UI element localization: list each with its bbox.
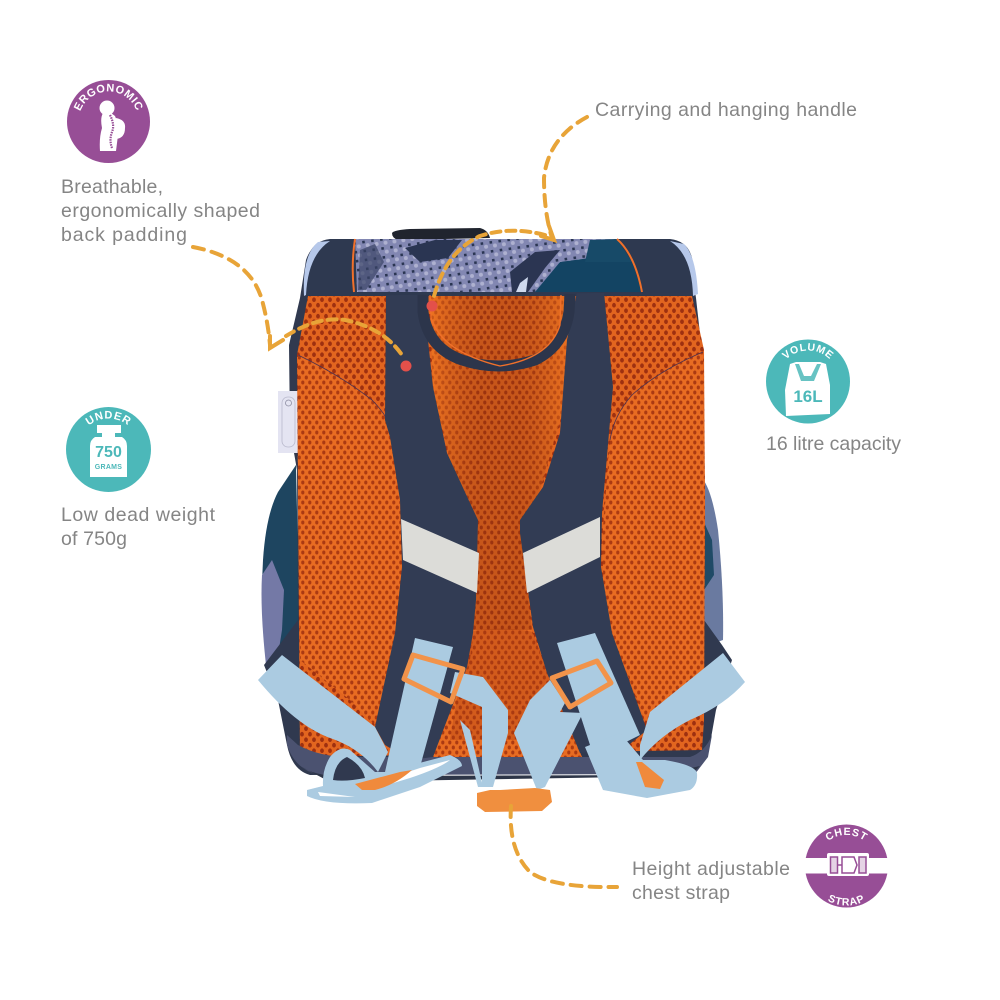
icon: weight (90, 425, 127, 477)
reflective strip right (523, 517, 600, 593)
text: ergonomic description: Breathable, (61, 176, 163, 198)
text: chest strap description: Height adjustable (632, 858, 790, 880)
strap band (805, 858, 888, 874)
reflective strip left (401, 519, 479, 593)
right side pocket (695, 470, 723, 650)
text: volume description: 16 litre capacity (766, 433, 901, 455)
backpack body (264, 240, 732, 775)
badge: volume (766, 340, 850, 424)
text: ergonomic description: back padding (61, 224, 187, 246)
left side pocket (262, 465, 300, 700)
badge text: under: UNDER (85, 410, 130, 425)
text: weight description: Low dead weight (61, 504, 216, 526)
left chest strap (450, 672, 508, 787)
centre mesh channel (430, 296, 582, 757)
badge text: strap: STRAP (828, 895, 863, 906)
right lower strap (557, 633, 640, 745)
right padded mesh (602, 352, 705, 725)
badge: chest strap (806, 824, 888, 908)
text: chest strap description: chest strap (632, 882, 730, 904)
weight unit: GRAMS (95, 464, 122, 471)
bottom edge band (287, 735, 712, 775)
left shoulder strap (375, 292, 478, 760)
badge text: ergonomic: ERGONOMIC (74, 84, 142, 111)
icon: backpack (785, 362, 830, 416)
backpack photo (258, 228, 745, 812)
left strap clip (355, 770, 412, 790)
side strap right (640, 653, 745, 760)
left buckle (404, 655, 463, 702)
upper mesh panel (297, 296, 705, 757)
arrow head: handle (541, 226, 554, 240)
top carry handle (392, 228, 490, 240)
right strap loop (585, 733, 697, 798)
right chest strap (514, 680, 583, 790)
dashed curve to handle point (433, 231, 545, 300)
back handle (423, 294, 570, 366)
dot: handle (426, 300, 438, 312)
dashed leader: handle (433, 117, 587, 300)
dot: back padding (400, 360, 412, 372)
side strap left (258, 655, 388, 772)
right buckle (552, 661, 611, 707)
icon: spine figure (100, 100, 125, 151)
right strap clip (636, 762, 664, 789)
mesh edge lines (298, 352, 703, 445)
text: weight description: of 750g (61, 528, 127, 550)
badge text: chest: CHEST (826, 828, 868, 840)
arrow head: back padding (270, 336, 283, 348)
tag (278, 391, 299, 453)
badge: weight (66, 407, 151, 492)
badge text: volume: VOLUME (781, 343, 834, 359)
icon: buckle (827, 853, 869, 876)
top flap (304, 239, 698, 296)
left lower strap (385, 638, 453, 772)
text: handle description: Carrying and hanging handle (595, 99, 857, 121)
text: ergonomic description: ergonomically shaped (61, 200, 260, 222)
badge: ergonomic (67, 80, 150, 163)
dashed leader: chest strap (511, 806, 617, 887)
backpack volume: 16L (793, 387, 823, 406)
left padded mesh (298, 355, 403, 725)
chest buckle (477, 788, 552, 812)
dashed curve to padding point (286, 319, 404, 358)
right shoulder strap (520, 292, 647, 753)
left strap loop (307, 749, 462, 803)
weight value: 750 (95, 444, 122, 461)
dashed leader: back padding (193, 247, 404, 358)
